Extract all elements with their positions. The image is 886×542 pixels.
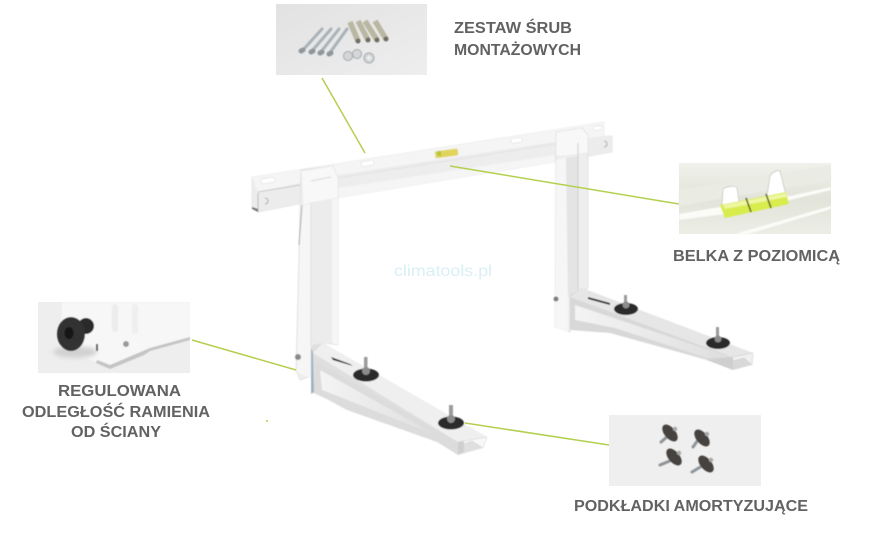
- left arm: [295, 343, 487, 455]
- watermark: climatools.pl: [394, 263, 492, 280]
- leader lines: [192, 78, 679, 445]
- rubber pad right front: [706, 327, 730, 349]
- label: beam with level: BELKA Z POZIOMICĄ: [673, 248, 840, 265]
- main bracket product: [252, 122, 753, 455]
- right arm: [554, 288, 753, 370]
- rubber pad left front: [438, 405, 464, 430]
- label: mounting screws set: MONTAŻOWYCH: [454, 41, 581, 59]
- rubber pad right rear: [614, 295, 638, 315]
- label: mounting screws set: [454, 18, 581, 59]
- left upright: [296, 166, 338, 380]
- rubber pad left rear: [353, 357, 379, 382]
- label: adjustable arm distance: [22, 383, 210, 441]
- photo: adjustable arm distance: [38, 302, 190, 373]
- photo: mounting screws: [276, 4, 427, 75]
- right upright: [555, 128, 588, 332]
- label: mounting screws set: ZESTAW ŚRUB: [454, 18, 572, 37]
- label: adjustable arm distance: REGULOWANA: [58, 383, 181, 400]
- label: anti-vibration washers: PODKŁADKI AMORTYZUJĄCE: [574, 498, 808, 515]
- label: adjustable arm distance: ODLEGŁOŚĆ RAMIENIA: [22, 402, 210, 421]
- mounting beam: [252, 122, 612, 212]
- photo: rubber washers: [609, 415, 761, 486]
- label: adjustable arm distance: OD ŚCIANY: [71, 422, 161, 441]
- photo: spirit level: [679, 163, 831, 234]
